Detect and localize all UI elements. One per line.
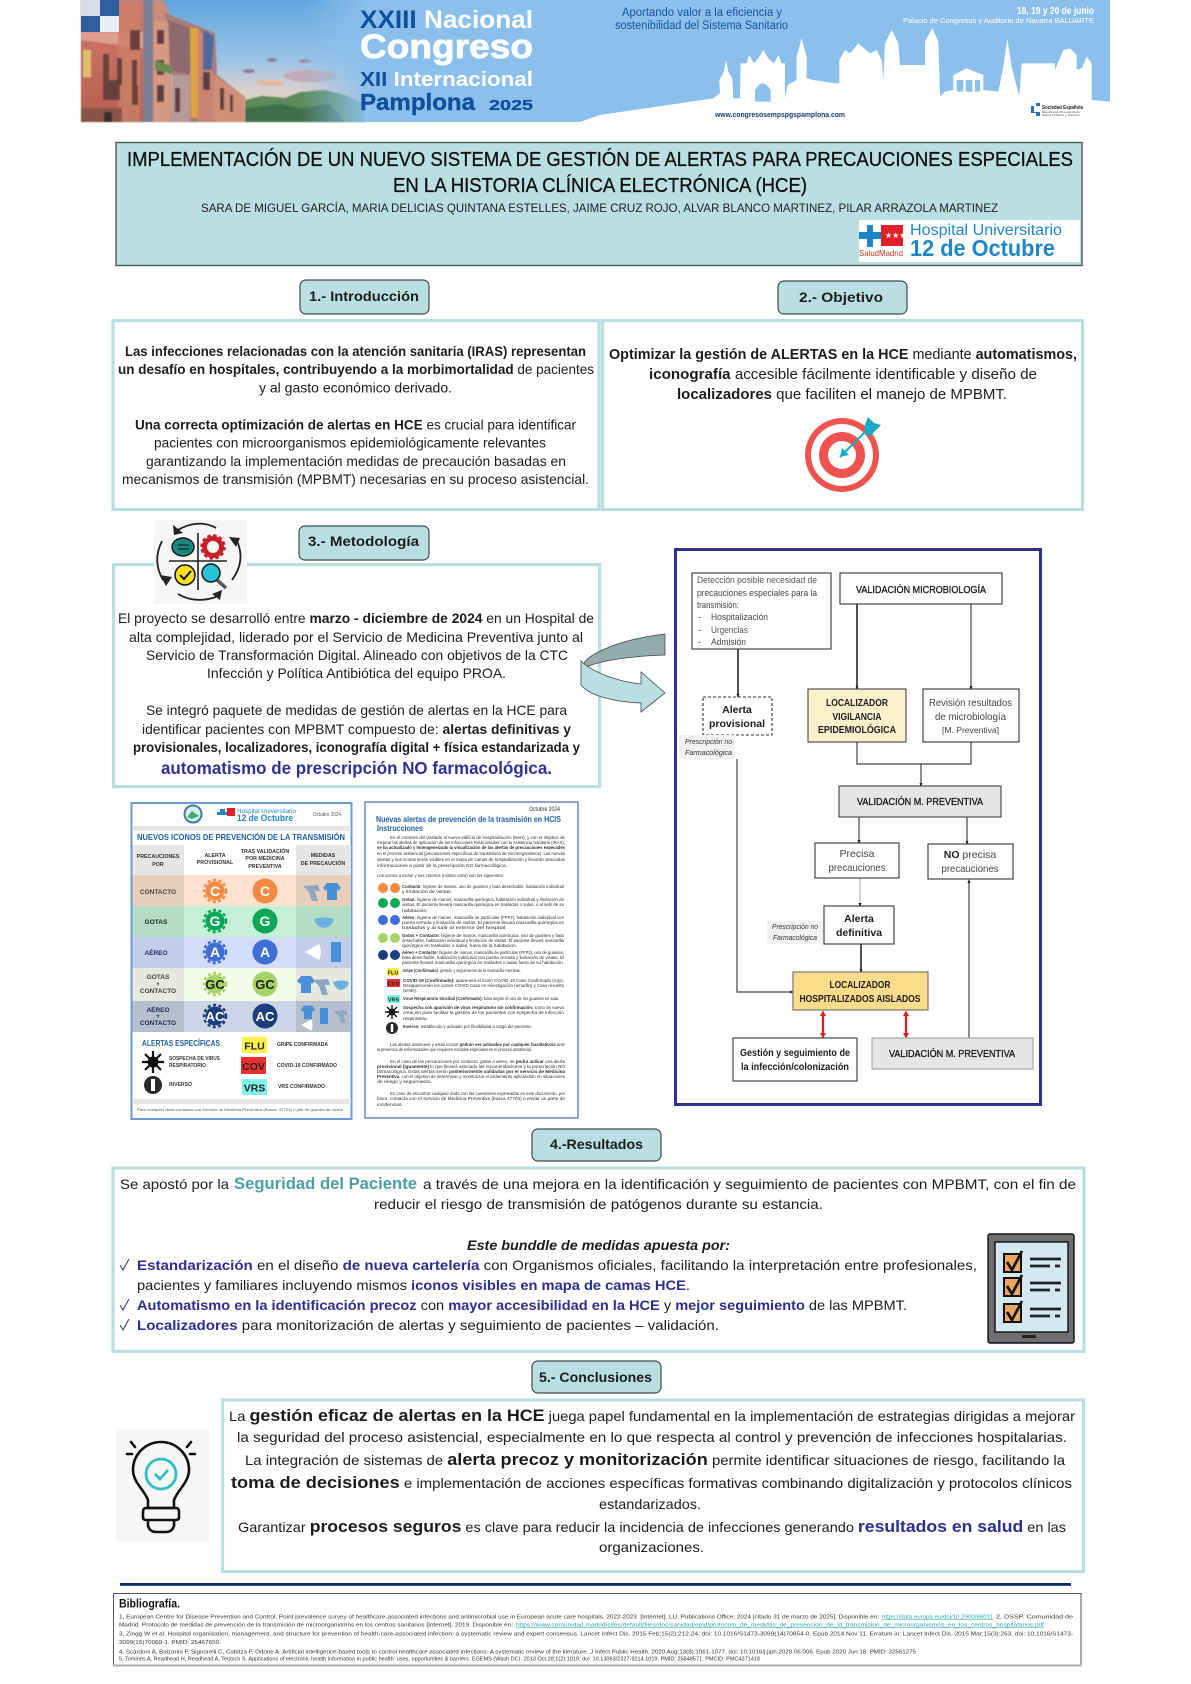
specific alerts section: COV	[242, 1061, 265, 1073]
row: gotas + contacto: GC	[205, 977, 225, 992]
flow box: localizador hospitalizados aislados: HOSPITALIZADOS AISLADOS	[800, 993, 920, 1005]
row: contacto: C	[210, 883, 220, 899]
bibliography references: https://www.comunidad.madrid/sites/default/files/doc/sanidad/epid/protocolo_de_medidas_de_prevencion_de_la_transmision_de_microorganismos_en_los_centros_hospitalarios.pdf	[516, 1622, 1045, 1628]
thumbnail logos row: Octubre 2024	[313, 812, 341, 818]
bibliography references	[119, 1614, 1073, 1662]
thumbnail icon table: PREVENTIVA	[248, 864, 282, 870]
document icon list: paciente llevará mascarilla quirúrgica en traslados o salas fuera de su habitación.	[402, 960, 564, 966]
document closing text: farmacológica. Estas alertas serán posteriormente validadas por el servicio de Medicina	[377, 1069, 565, 1075]
banner society logo: Medicina Preventiva,	[1042, 110, 1080, 114]
methodology paragraph 2: automatismo de prescripción NO farmacológica.	[161, 758, 552, 778]
flow box: deteccion: -	[698, 637, 701, 648]
results checklist items: pacientes y familiares incluyendo mismos iconos visibles en mapa de camas HCE .	[137, 1277, 690, 1293]
banner title: congress name: Pamplona	[360, 89, 475, 115]
row: gotas	[132, 906, 351, 937]
banner dates and venue: Palacio de Congresos y Auditorio de Navarra BALUARTE	[903, 16, 1094, 25]
document icon list	[378, 883, 564, 1034]
thumbnail icon table: POR MEDICINA	[245, 856, 285, 862]
thumbnail icon table: TRAS VALIDACIÓN	[241, 847, 289, 855]
methodology paragraph 1: alta complejidad, liderado por el Servicio de Medicina Preventiva junto al	[129, 629, 583, 645]
document icon list: FLU	[388, 970, 398, 976]
hospital logo: SaludMadrid	[859, 249, 903, 258]
results intro text: reducir el riesgo de transmisión de patógenos durante su estancia.	[374, 1196, 823, 1212]
document icon list: Gotas + Contacto: higiene de manos, mascarilla quirúrgica, uso de guantes y bata	[402, 933, 564, 939]
flow label: prescripcion no farmacologica: Farmacológica	[685, 748, 732, 757]
results intro text: a través de una mejora en la identificación y seguimiento de pacientes con MPBMT, con el fin de	[423, 1176, 1076, 1192]
heading pill: metodologia	[299, 526, 429, 560]
thumbnail logos row: Hospital Universitario	[237, 808, 296, 815]
thumbnail logos row: 12 de Octubre	[237, 813, 293, 823]
flow box: precisa precauciones	[815, 843, 899, 878]
poster thumbnail: nuevos iconos	[132, 803, 352, 1119]
intro paragraph 1: y al gasto económico derivado.	[259, 380, 452, 396]
document icon list: COV	[388, 982, 400, 988]
authors: SARA DE MIGUEL GARCÍA, MARIA DELICIAS QUINTANA ESTELLES, JAIME CRUZ ROJO, ALVAR BLANCO MARTINEZ, PILAR ARRAZOLA MARTINEZ	[201, 200, 999, 215]
bibliography references: 5, Tomines A, Readhead H, Readhead A, Teutsch S. Applications of electronic health information in public health: uses, opportunities & barriers. EGEMS (Wash DC). 2013 Oct 28;1(2):1019. doi: 10.13063/2327-9214.1019. PMID: 25848571; PMCID: PMC4371418	[119, 1656, 760, 1662]
icon: tablet checklist	[988, 1234, 1074, 1343]
results intro text	[120, 1174, 1076, 1212]
specific alerts section: VRS CONFIRMADO	[278, 1084, 325, 1090]
heading pill: introduccion	[300, 280, 429, 314]
conclusions text: La integración de sistemas de alerta precoz y monitorización permite identificar situaciones de riesgo, facilitando la	[245, 1450, 1065, 1469]
flow box: localizador vigilancia: EPIDEMIOLÓGICA	[818, 723, 896, 736]
row: aereo: AÉREO	[144, 948, 168, 957]
document intro text: Los iconos a incluir y sus criterios (mismo color) son los siguientes:	[377, 873, 504, 879]
thumbnail icon table: PRECAUCIONES	[137, 854, 180, 860]
banner title: congress name	[360, 6, 533, 115]
flow box: precisa precauciones: Precisa	[839, 848, 875, 860]
flow box: alerta provisional: Alerta	[722, 704, 752, 716]
flow box: gestion y seguimiento: la infección/colonización	[741, 1061, 849, 1073]
flow box: deteccion: -	[698, 625, 701, 636]
flow label: prescripcion no farmacologica 2: Prescripción no	[772, 922, 818, 931]
banner skyline silhouette	[540, 28, 1110, 122]
thumbnail icon table: ALERTA	[204, 853, 226, 859]
flow box: validacion m. preventiva 2	[872, 1038, 1033, 1069]
flow box: deteccion: precauciones especiales para la	[697, 588, 818, 599]
icon: methodology cycle	[154, 520, 247, 604]
panel: conclusiones	[222, 1400, 1084, 1572]
flow box: alerta definitiva: Alerta	[844, 913, 874, 925]
document icon list: Aéreo + Contacto: higiene de manos, mascarilla de partículas (FFP2), uso de guantes,	[402, 950, 564, 956]
title block	[116, 142, 1082, 266]
methodology paragraph 2: identificar pacientes con MPBMT compuesto de: alertas definitivas y	[142, 721, 571, 737]
flow box: revision resultados: [M. Preventiva]	[942, 726, 999, 735]
specific alerts section	[142, 1037, 337, 1095]
bibliography references: 4, Scardoni A, Balzarini F, Signorelli C, Cabitza F, Odone A. Artificial intelligence-based tools to control healthcare associated infections: A systematic review of the literature. J Infect Public Health. 2020 Aug;13(8):1061-1077. doi: 10.1016/j.jiph.2020.06.006. Epub 2020 Jun 18. PMID: 32561275	[119, 1650, 916, 1656]
panel: resultados	[113, 1168, 1084, 1352]
conclusions text: organizaciones.	[599, 1539, 704, 1555]
document title: Nuevas alertas de prevención de la trasmisión en HCIS	[376, 814, 561, 824]
flow label: prescripcion no farmacologica 2: Farmacológica	[773, 933, 817, 942]
poster title: EN LA HISTORIA CLÍNICA ELECTRÓNICA (HCE)	[393, 174, 807, 197]
flow label: prescripcion no farmacologica: Prescripción no	[685, 737, 732, 746]
heading pill: objetivo	[778, 281, 907, 314]
document title	[376, 814, 561, 833]
bibliography box	[113, 1594, 1082, 1666]
specific alerts section: RESPIRATORIO	[169, 1063, 206, 1069]
flow box: deteccion	[692, 573, 831, 649]
results checklist items: Estandarización en el diseño de nueva cartelería con Organismos oficiales, facilitando la interpretación entre profesionales,	[137, 1257, 977, 1273]
specific alerts section: COVID-19 CONFIRMADO	[277, 1063, 337, 1069]
hospital logo	[859, 220, 1080, 262]
conclusions text: La gestión eficaz de alertas en la HCE juega papel fundamental en la implementación de estrategias dirigidas a mejorar	[229, 1406, 1075, 1425]
document icon list: bata desechable, habitación individual con puerta cerrada y limitación de visitas. El	[402, 955, 564, 961]
document icon list: puerta cerrada y limitación de visitas. El paciente llevará mascarilla quirúrgica en	[402, 920, 564, 926]
intro paragraph 2: pacientes con microorganismos epidemiológicamente relevantes	[154, 434, 546, 450]
arrows: red bidirectional	[820, 1010, 909, 1038]
document icon list: Desaparecerán los iconos COVID Caso en Investigación (amarillo) y Caso resuelto	[403, 983, 564, 989]
hospital logo: 12 de Octubre	[910, 235, 1055, 261]
heading pill: resultados	[532, 1129, 661, 1161]
flow box: alerta definitiva: definitiva	[836, 927, 882, 939]
flow box: no precisa precauciones	[928, 844, 1013, 879]
banner society logo: Salud Pública y Gestión	[1042, 113, 1080, 117]
conclusions text: estandarizados.	[599, 1496, 701, 1512]
row: gotas: GOTAS	[145, 919, 168, 926]
panel: introduccion	[113, 320, 599, 510]
flow box: validacion m. preventiva: VALIDACIÓN M. PREVENTIVA	[857, 795, 983, 808]
objective text: localizadores que faciliten el manejo de MPBMT.	[677, 386, 1007, 403]
flow box: validacion microbiologia	[840, 573, 1002, 604]
flow box: validacion m. preventiva 2: VALIDACIÓN M. PREVENTIVA	[889, 1047, 1015, 1060]
row: aereo: A	[210, 944, 220, 960]
heading pill: metodologia: 3.- Metodología	[308, 533, 419, 549]
row: gotas + contacto	[132, 968, 351, 1001]
objective text: iconografía accesible fácilmente identificable y diseño de	[649, 366, 1037, 383]
row: contacto: CONTACTO	[140, 889, 176, 896]
bibliography references: https://data.europa.eu/doi/10.2900/88011	[882, 1614, 993, 1620]
banner society logo: Sociedad Española	[1042, 105, 1083, 111]
hospital logo: Hospital Universitario	[910, 222, 1062, 239]
flow box: gestion y seguimiento: Gestión y seguimiento de	[740, 1047, 850, 1059]
document icon list: visitas. El paciente llevará mascarilla quirúrgica en traslados o salas, o al salir de su	[402, 902, 564, 908]
flow box: localizador hospitalizados aislados	[793, 972, 928, 1010]
document icon list: (verde).	[403, 988, 417, 994]
poster title: IMPLEMENTACIÓN DE UN NUEVO SISTEMA DE GESTIÓN DE ALERTAS PARA PRECAUCIONES ESPECIALES	[127, 148, 1073, 171]
flow label: prescripcion no farmacologica	[679, 735, 735, 759]
methodology paragraph 1: Servicio de Transformación Digital. Alineado con objetivos de la CTC	[146, 647, 568, 663]
document intro text: se ha actualizado y homogeneizado la visualización de las alertas de precauciones especiales	[377, 845, 565, 851]
document icon list: y limitación de visitas.	[402, 889, 452, 895]
thumbnail icon table: POR	[152, 862, 164, 868]
row: aereo + contacto: AC	[206, 1009, 225, 1024]
document icon list: respiratoria.	[403, 1016, 428, 1022]
row: gotas + contacto: +	[156, 982, 160, 988]
heading pill: resultados: 4.-Resultados	[550, 1136, 643, 1152]
bibliography references: 3099(15)70069-1. PMID: 25467650.	[119, 1640, 221, 1646]
thumbnail icon table: DE PRECAUCIÓN	[301, 859, 345, 867]
document icon list: Sospecha con aparición de virus respiratorio sin confirmación: icono de nueva	[403, 1005, 564, 1011]
document icon list: habitación.	[402, 908, 428, 914]
poster thumbnail: instrucciones document: Octubre 2024	[529, 806, 560, 813]
banner dates and venue	[903, 6, 1094, 25]
panel: objetivo	[602, 320, 1082, 510]
hospital logo: ★★★	[885, 231, 907, 240]
specific alerts section: ALERTAS ESPECÍFICAS	[142, 1038, 220, 1048]
panel: metodologia	[114, 565, 600, 787]
bibliography references: 2, DSSP. Comunidad de	[996, 1614, 1073, 1620]
thumbnail footnote: Para cualquier duda contactar con Servicio de Medicina Preventiva (Busca: 47704) o jefe de guardia de noche	[137, 1107, 344, 1112]
heading pill: objetivo: 2.- Objetivo	[799, 289, 883, 305]
row: gotas + contacto: GOTAS	[147, 974, 170, 981]
intro paragraph 1	[118, 343, 594, 396]
intro paragraph 1: un desafío en hospitales, contribuyendo a la morbimortalidad de pacientes	[118, 361, 594, 377]
thumbnail logos row	[184, 806, 341, 823]
flow box: precisa precauciones: precauciones	[828, 862, 886, 874]
row: aereo: A	[260, 944, 270, 960]
document closing text: Preventiva, con el objetivo de determinar y monitorizar el aislamiento aplicándolo en situaciones	[377, 1074, 566, 1080]
document closing text: provisional (iguamente) lo que llevará asociado las recomendaciones y la prescripción NO	[377, 1064, 565, 1070]
document icon list: Aéreo: higiene de manos, mascarilla de partículas (FFP2), habitación individual con	[402, 915, 564, 921]
flow label: prescripcion no farmacologica 2	[767, 921, 823, 944]
poster thumbnail: instrucciones document	[365, 802, 578, 1118]
row: aereo + contacto: +	[156, 1014, 160, 1020]
document intro text: En el contexto del traslado al nuevo edificio de hospitalización (NeH), y con el objetivo de	[390, 835, 565, 841]
banner title: congress name: XXIII Nacional	[360, 6, 533, 34]
heading pill: conclusiones: 5.- Conclusiones	[539, 1369, 652, 1385]
conclusions text	[229, 1406, 1075, 1555]
flow box: alerta provisional	[703, 697, 772, 735]
document icon list: desechable, habitación individual y limitación de visitas. El paciente llevará mascarilla	[402, 938, 564, 944]
document closing text	[377, 1042, 566, 1108]
document icon list: traslados y al salir al exterior del hospital.	[402, 925, 507, 931]
methodology paragraph 1: El proyecto se desarrolló entre marzo - diciembre de 2024 en un Hospital de	[118, 610, 594, 626]
row: aereo + contacto: CONTACTO	[140, 1020, 176, 1027]
conclusions text: la seguridad del proceso asistencial, especialmente en lo que respecta al control y prevención de infecciones hospitalarias.	[237, 1429, 1067, 1445]
bibliography heading: Bibliografía.	[119, 1596, 180, 1610]
results checklist items: Automatismo en la identificación precoz con mayor accesibilidad en la HCE y mejor seguimiento de las MPBMT.	[137, 1297, 907, 1313]
document icon list: VRS	[388, 998, 399, 1004]
document intro text	[377, 835, 566, 879]
banner website url: www.congresosempspgspamplona.com	[714, 110, 845, 119]
document icon list: Gotas: higiene de manos, mascarilla quirúrgica, habitación individual y limitación de	[402, 897, 564, 903]
intro paragraph 2: Una correcta optimización de alertas en HCE es crucial para identificar	[135, 416, 576, 432]
banner title: congress name: 2025	[489, 98, 533, 114]
row: contacto	[132, 875, 351, 906]
intro paragraph 2: mecanismos de transmisión (MPBMT) necesarias en su proceso asistencial.	[122, 471, 589, 487]
banner tagline: Aportando valor a la eficiencia y	[622, 7, 782, 19]
document icon list: COVID-19 (Confirmado): aparecerá el icono COVID-19 Caso Confirmado (rojo).	[403, 978, 564, 984]
flow box: deteccion: Hospitalización	[711, 612, 768, 623]
flow box: revision resultados	[923, 689, 1019, 742]
document intro text: alertas y sus iconos serán visibles en el mapa de camas de hospitalización y llevarán asociadas	[377, 857, 566, 863]
results intro text: Se apostó por la	[120, 1176, 229, 1192]
flow box: deteccion: Detección posible necesidad de	[697, 575, 817, 586]
methodology paragraph 1	[118, 610, 594, 681]
thumbnail icon table: PROVISIONAL	[197, 860, 234, 866]
row: gotas + contacto: CONTACTO	[140, 988, 176, 995]
specific alerts section: SOSPECHA DE VIRUS	[169, 1056, 221, 1062]
document intro text: en el proceso asistencial (precauciones específicas de transmisión de microorganismos). Las nuevas	[377, 851, 566, 857]
specific alerts section: FLU	[244, 1040, 265, 1052]
heading pill: introduccion: 1.- Introducción	[309, 288, 419, 304]
results checklist items	[120, 1257, 977, 1333]
flow connectors	[736, 604, 972, 1038]
document icon list: Inverso: establecido y activado por flexibilidad a cargo del paciente.	[403, 1024, 532, 1030]
row: aereo	[132, 937, 351, 968]
flow box: revision resultados: de microbiología	[935, 711, 1006, 723]
flow box: alerta provisional: provisional	[709, 718, 765, 730]
document intro text: informaciones a partir de la prescripción NO farmacológica.	[377, 863, 507, 869]
document title: Instrucciones	[377, 823, 423, 833]
intro paragraph 2	[122, 416, 589, 487]
banner: congress header	[81, 0, 1110, 122]
document closing text: favor, contacta con el Servicio de Medicina Preventiva (busca 47704) o enviar un parte de	[377, 1096, 565, 1102]
conclusions text: toma de decisiones e implementación de acciones específicas formativas combinando digitalización y protocolos clínicos	[231, 1473, 1072, 1492]
document intro text: mejorar las alertas de aplicación de las Infecciones Relacionadas con la Asistencia Sanitaria (IRAS),	[377, 840, 565, 846]
document icon list: Contacto: higiene de manos, uso de guantes y bata desechable, habitación individual	[402, 884, 564, 890]
flow box: revision resultados: Revisión resultados	[929, 697, 1012, 709]
flow box: localizador vigilancia	[808, 689, 906, 742]
document closing text: la presencia de enfermedades que requieren medidas especiales en el proceso asistencial.	[377, 1047, 532, 1053]
document closing text: Las alertas anteriores y estos iconos podrán ser activados por cualquier facultativo/a ante	[390, 1042, 565, 1048]
banner title: congress name: XII Internacional	[360, 69, 533, 91]
flow box: deteccion: Admisión	[711, 637, 746, 648]
document closing text: En el caso de las precauciones por contacto, gotas o aéreo, se podrá activar una alerta	[390, 1059, 565, 1065]
intro paragraph 2: garantizando la implementación medidas de precaución basadas en	[146, 453, 566, 469]
row: aereo + contacto: AÉREO	[146, 1005, 170, 1014]
document icon list: quirúrgica en traslados o salas, fuera de la habitación.	[402, 943, 517, 949]
flow box: localizador hospitalizados aislados: LOCALIZADOR	[830, 979, 891, 991]
objective text	[609, 346, 1077, 403]
row: gotas + contacto: GC	[255, 977, 275, 992]
banner tagline	[615, 7, 788, 32]
results checklist items: Localizadores para monitorización de alertas y seguimiento de pacientes – validación.	[137, 1317, 719, 1333]
document icon list: Virus Respiratorio Sincitial (Confirmado): bata según el uso de los guantes en sala.	[403, 996, 559, 1002]
bibliography references: 1, European Centre for Disease Prevention and Control. Point prevalence survey of healthcare-associated infections and antimicrobial use in European acute care hospitals, 2022-2023. [Internet]. LU: Publications Office; 2024 [citado 31 de marzo de 2025]. Disponible en:	[119, 1614, 879, 1620]
flow box: alerta definitiva	[824, 906, 894, 944]
specific alerts section: INVERSO	[169, 1082, 192, 1088]
row: gotas: G	[210, 913, 221, 929]
bibliography references: Madrid. Protocolo de medidas de prevención de la transmisión de microorganismos en los centros sanitarios [Internet]. 2019. Disponible en:	[119, 1622, 513, 1628]
methodology paragraph 2: provisionales, localizadores, iconografía digital + física estandarizada y	[133, 739, 580, 755]
document closing text: incidencias.	[377, 1102, 403, 1108]
flow box: deteccion: Urgencias	[711, 625, 748, 636]
row: aereo + contacto	[132, 1001, 351, 1032]
flow box: localizador vigilancia: VIGILANCIA	[832, 711, 882, 723]
arrow: curved ribbon to flowchart	[581, 634, 665, 712]
thumbnail icon table: MEDIDAS	[311, 853, 336, 859]
conclusions text: Garantizar procesos seguros es clave para reducir la incidencia de infecciones generando resultados en salud en las	[238, 1517, 1066, 1536]
icon: target with arrow	[805, 417, 881, 492]
heading pill: conclusiones	[532, 1361, 661, 1393]
document icon list: Gripe (Confirmado): gestión y seguimiento de la mascarilla mientras.	[403, 968, 521, 974]
flowchart panel	[676, 550, 1040, 1104]
intro paragraph 1: Las infecciones relacionadas con la atención sanitaria (IRAS) representan	[125, 343, 586, 359]
document icon list: creación para facilitar la gestión de los pacientes con sospecha de infección	[403, 1010, 564, 1016]
flow box: deteccion: transmisión:	[697, 600, 739, 611]
flow box: validacion microbiologia: VALIDACIÓN MICROBIOLOGÍA	[856, 583, 986, 596]
icon: light bulb with check	[116, 1430, 210, 1542]
banner title: congress name: Congreso	[360, 28, 533, 66]
flow box: gestion y seguimiento	[733, 1038, 857, 1081]
methodology paragraph 2: Se integró paquete de medidas de gestión de alertas en la HCE para	[146, 702, 567, 718]
banner dates and venue: 18, 19 y 20 de junio	[1017, 6, 1094, 17]
specific alerts section: GRIPE CONFIRMADA	[277, 1042, 328, 1048]
document closing text: de riesgo y seguimiento.	[377, 1079, 432, 1085]
banner tagline: sostenibilidad del Sistema Sanitario	[615, 20, 788, 32]
flow box: no precisa precauciones: precauciones	[942, 863, 998, 875]
bundle subheading: Este bunddle de medidas apuesta por:	[467, 1237, 730, 1253]
results intro text: Seguridad del Paciente	[234, 1174, 417, 1193]
flow box: no precisa precauciones: NO precisa	[944, 849, 996, 861]
banner society logo	[1031, 103, 1083, 117]
flow box: deteccion: -	[698, 612, 701, 623]
methodology paragraph 1: Infección y Política Antibiótica del equipo PROA.	[207, 665, 506, 681]
row: aereo + contacto: AC	[256, 1009, 275, 1024]
thumbnail heading: NUEVOS ICONOS DE PREVENCIÓN DE LA TRANSMISIÓN	[137, 831, 345, 842]
row: gotas: G	[260, 913, 271, 929]
specific alerts section: VRS	[244, 1082, 265, 1094]
banner photo: street at sunset	[81, 0, 372, 122]
objective text: Optimizar la gestión de ALERTAS en la HCE mediante automatismos,	[609, 346, 1077, 363]
thumbnail icon table	[132, 845, 351, 1032]
row: contacto: C	[260, 883, 270, 899]
document closing text: En caso de encontrar cualquier duda con las cuestiones expresadas en este documento, por	[390, 1091, 565, 1097]
methodology paragraph 2	[133, 702, 580, 778]
flow box: validacion m. preventiva	[839, 786, 1001, 817]
bibliography references: 3, Zingg W et al. Hospital organisation, management, and structure for prevention of health-care-associated infection: a systematic review and expert consensus. Lancet Infect Dis. 2015 Feb;15(2):212-24. doi: 10.1016/S1473-3099(14)70854-0. Epub 2014 Nov 11. Erratum in: Lancet Infect Dis. 2015 Mar;15(3):263. doi: 10.1016/S1473-	[119, 1632, 1073, 1638]
poster title	[127, 148, 1073, 197]
flow box: localizador vigilancia: LOCALIZADOR	[826, 697, 888, 709]
